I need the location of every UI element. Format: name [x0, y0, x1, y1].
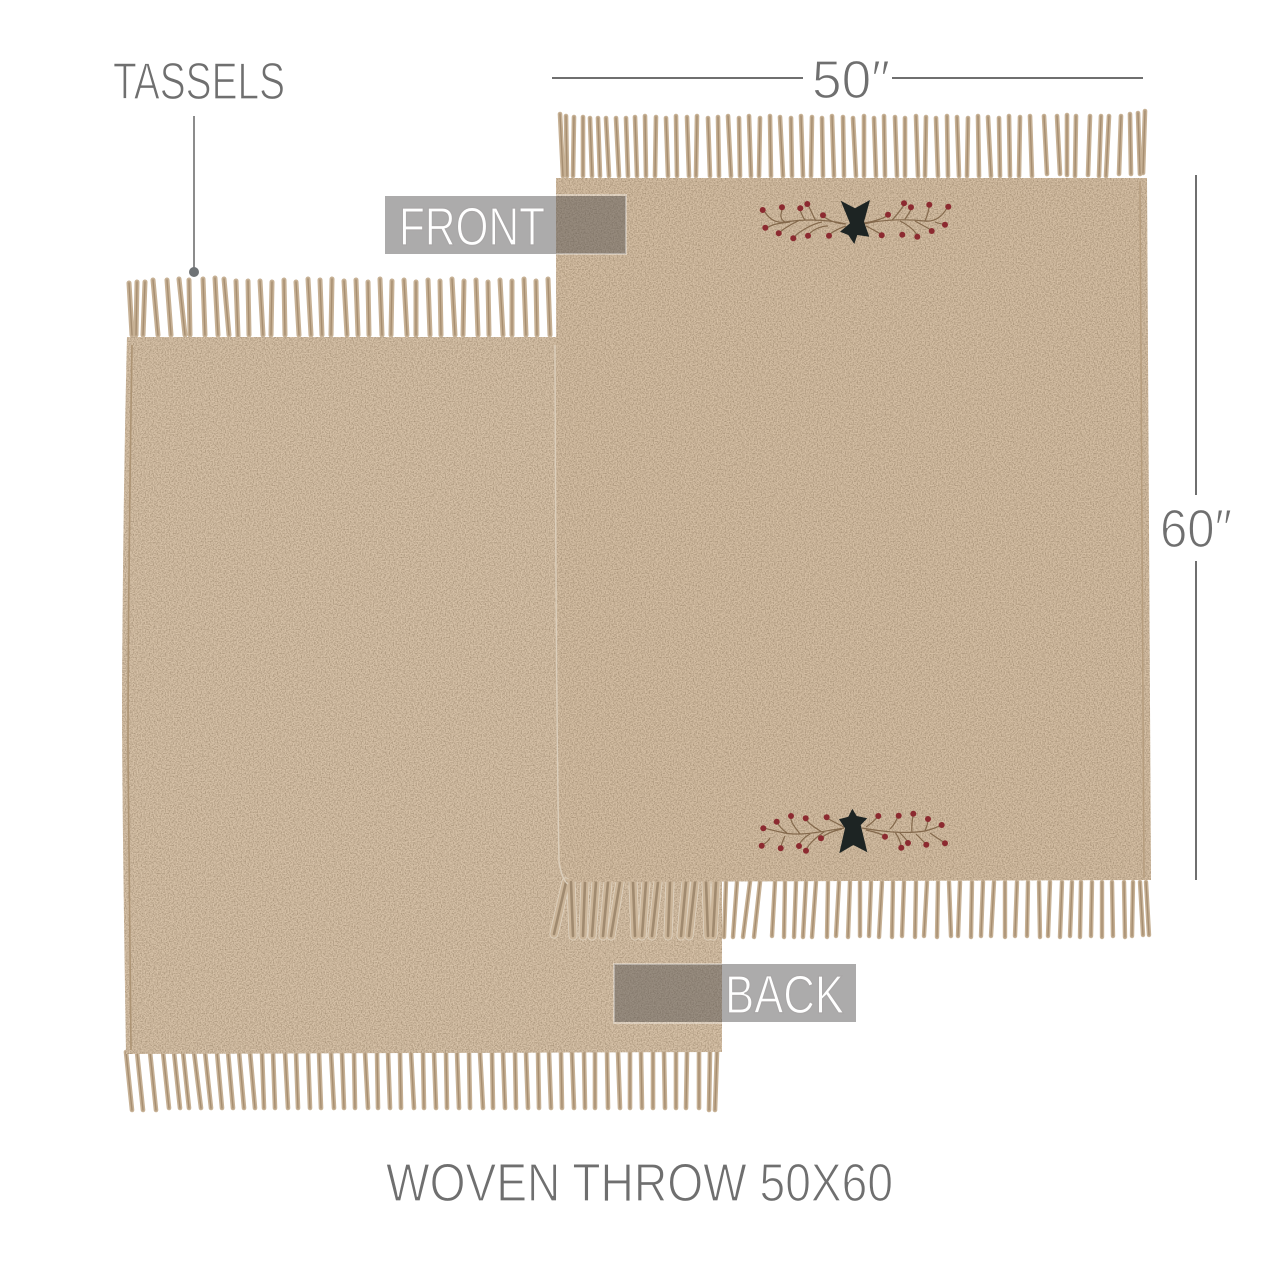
panel: front of throw	[554, 111, 1151, 937]
front top tassels	[560, 111, 1145, 176]
callout: tassels: TASSELS	[113, 53, 285, 111]
dimension: width 50 inches: 50″	[812, 50, 890, 110]
label: back: BACK	[725, 965, 844, 1025]
callout: tassels	[113, 53, 285, 277]
front fabric	[556, 178, 1151, 882]
embroidery: top star and berries	[760, 200, 951, 244]
back top tassels	[129, 278, 550, 336]
back bottom tassels	[126, 1052, 717, 1110]
embroidery: bottom star and berries	[759, 809, 948, 854]
front bottom tassels over the back panel	[554, 882, 716, 936]
title: WOVEN THROW 50X60	[386, 1153, 893, 1213]
dimension: height 60 inches: 60″	[1160, 499, 1232, 559]
label: front: FRONT	[399, 197, 545, 257]
back fabric	[122, 337, 722, 1054]
front bottom tassels over white	[724, 882, 1149, 937]
panel: back of throw	[122, 278, 722, 1110]
label: back	[614, 964, 856, 1025]
